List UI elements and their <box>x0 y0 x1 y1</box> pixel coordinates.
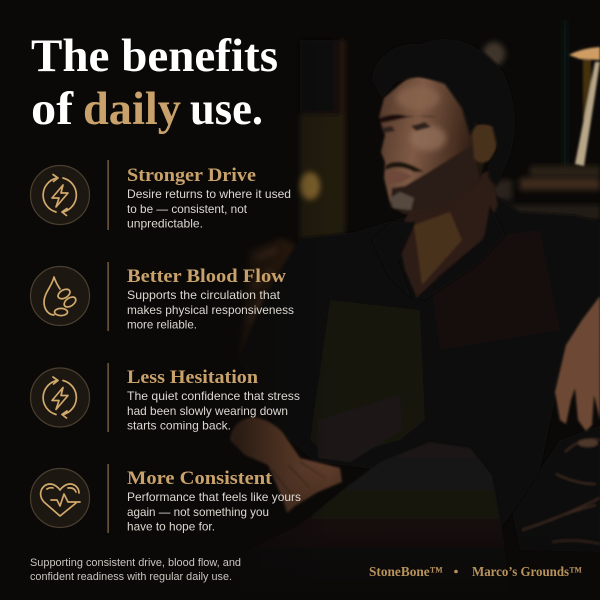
leather armchair seat <box>512 425 600 552</box>
description <box>127 390 300 432</box>
benefit: less hesitation <box>30 363 300 432</box>
description: Desire returns to where it used <box>127 188 291 201</box>
warm bokeh lights <box>300 42 505 200</box>
brand names: Marco’s Grounds™ <box>472 564 582 579</box>
description <box>127 491 301 534</box>
black shirt <box>238 192 600 530</box>
icon: heart with pulse line <box>30 468 90 528</box>
description: Supports the circulation that <box>127 289 281 302</box>
divider <box>108 160 109 230</box>
dark hair <box>372 39 515 187</box>
benefit: stronger drive <box>30 160 291 230</box>
heading: Less Hesitation <box>127 367 258 388</box>
face <box>379 76 498 214</box>
icon: lightning bolt in cycle arrows <box>30 368 90 427</box>
description: starts coming back. <box>127 420 231 432</box>
right hand <box>555 296 600 431</box>
title: use. <box>190 83 263 135</box>
description: had been slowly wearing down <box>127 405 288 418</box>
description: more reliable. <box>127 318 197 332</box>
benefit: more consistent <box>30 464 301 534</box>
description <box>127 289 294 332</box>
benefit: better blood flow <box>30 262 294 332</box>
leather armchair back <box>240 238 302 360</box>
heading: Stronger Drive <box>127 165 256 186</box>
table lamp <box>569 47 600 166</box>
divider <box>108 464 109 533</box>
description: have to hope for. <box>127 520 215 534</box>
description: makes physical responsiveness <box>127 304 294 317</box>
dark trousers <box>215 442 510 600</box>
heading: More Consistent <box>127 468 273 489</box>
footer note: Supporting consistent drive, blood flow, and <box>30 557 241 569</box>
title: of <box>31 83 74 135</box>
heading: Better Blood Flow <box>127 266 286 287</box>
forearm and left hand <box>230 417 342 513</box>
title: daily <box>83 83 181 135</box>
description: Performance that feels like yours <box>127 491 301 504</box>
brand names: StoneBone™ <box>369 564 443 579</box>
icon: lightning bolt in cycle arrows <box>30 166 90 224</box>
footer note: confident readiness with regular daily use. <box>30 571 232 583</box>
room background <box>300 20 600 240</box>
neck and open collar <box>372 170 505 300</box>
icon: blood drop with seeds <box>30 266 90 326</box>
divider <box>108 262 109 331</box>
divider <box>108 363 109 432</box>
title: The benefits <box>31 30 278 82</box>
brand names <box>369 564 582 579</box>
description: The quiet confidence that stress <box>127 390 300 403</box>
footer note <box>30 557 241 583</box>
description: to be — consistent, not <box>127 203 248 216</box>
description: unpredictable. <box>127 218 203 230</box>
description: again — not something you <box>127 506 269 519</box>
title <box>31 30 278 135</box>
description <box>127 188 291 230</box>
